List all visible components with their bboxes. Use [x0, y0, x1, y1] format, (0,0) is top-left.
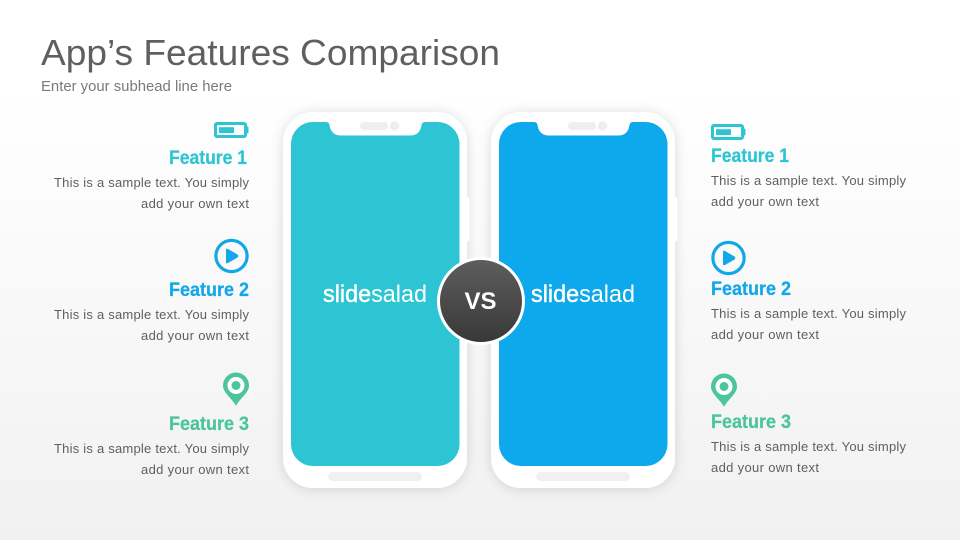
- text: left feature 1 description: [54, 175, 250, 211]
- text: left feature 1 description: add your own text: [141, 196, 249, 211]
- vs badge: VS: [464, 288, 497, 315]
- heading: right feature 2: Feature 2: [711, 278, 791, 300]
- text: left feature 2 description: This is a sample text. You simply: [54, 307, 250, 322]
- phone screen right: [499, 122, 668, 466]
- logo left: slidesalad: [323, 281, 427, 308]
- text: left feature 3 description: add your own text: [141, 462, 249, 477]
- heading: left feature 2: Feature 2: [169, 279, 249, 301]
- logo right: slidesalad: [531, 281, 635, 308]
- heading: left feature 3: Feature 3: [169, 413, 249, 435]
- icon: battery right: [712, 126, 746, 138]
- speaker and camera left: [360, 121, 399, 131]
- icon: battery left: [216, 124, 248, 136]
- heading: left feature 1: Feature 1: [169, 147, 247, 169]
- icon: play right: [713, 242, 744, 274]
- phone screen left: [291, 122, 460, 466]
- text: left feature 2 description: [54, 307, 250, 343]
- panel: right features: [711, 126, 906, 475]
- text: right feature 2 description: add your own text: [711, 327, 819, 342]
- speaker and camera right: [568, 121, 607, 131]
- text: right feature 1 description: This is a sample text. You simply: [711, 173, 906, 188]
- title: App’s Features Comparison: [41, 32, 500, 73]
- home bar left: [328, 472, 422, 481]
- heading: right feature 1: Feature 1: [711, 145, 789, 167]
- text: left feature 1 description: This is a sample text. You simply: [54, 175, 250, 190]
- text: right feature 2 description: [711, 306, 906, 342]
- vs badge: [438, 258, 524, 344]
- text: left feature 3 description: This is a sample text. You simply: [54, 441, 250, 456]
- panel: left features: [54, 124, 250, 477]
- icon: location pin right: [711, 374, 737, 407]
- text: right feature 2 description: This is a sample text. You simply: [711, 306, 906, 321]
- text: right feature 3 description: [711, 439, 906, 475]
- panel: left phone: [283, 112, 470, 488]
- text: left feature 2 description: add your own text: [141, 328, 249, 343]
- home bar right: [536, 472, 630, 481]
- subhead: Enter your subhead line here: [41, 79, 232, 95]
- text: right feature 1 description: [711, 173, 906, 209]
- heading: right feature 3: Feature 3: [711, 411, 791, 433]
- text: right feature 3 description: add your own text: [711, 460, 819, 475]
- icon: location pin left: [223, 372, 249, 406]
- text: left feature 3 description: [54, 441, 250, 477]
- icon: play left: [216, 240, 247, 272]
- panel: right phone: [491, 112, 678, 488]
- text: right feature 1 description: add your own text: [711, 194, 819, 209]
- text: right feature 3 description: This is a sample text. You simply: [711, 439, 906, 454]
